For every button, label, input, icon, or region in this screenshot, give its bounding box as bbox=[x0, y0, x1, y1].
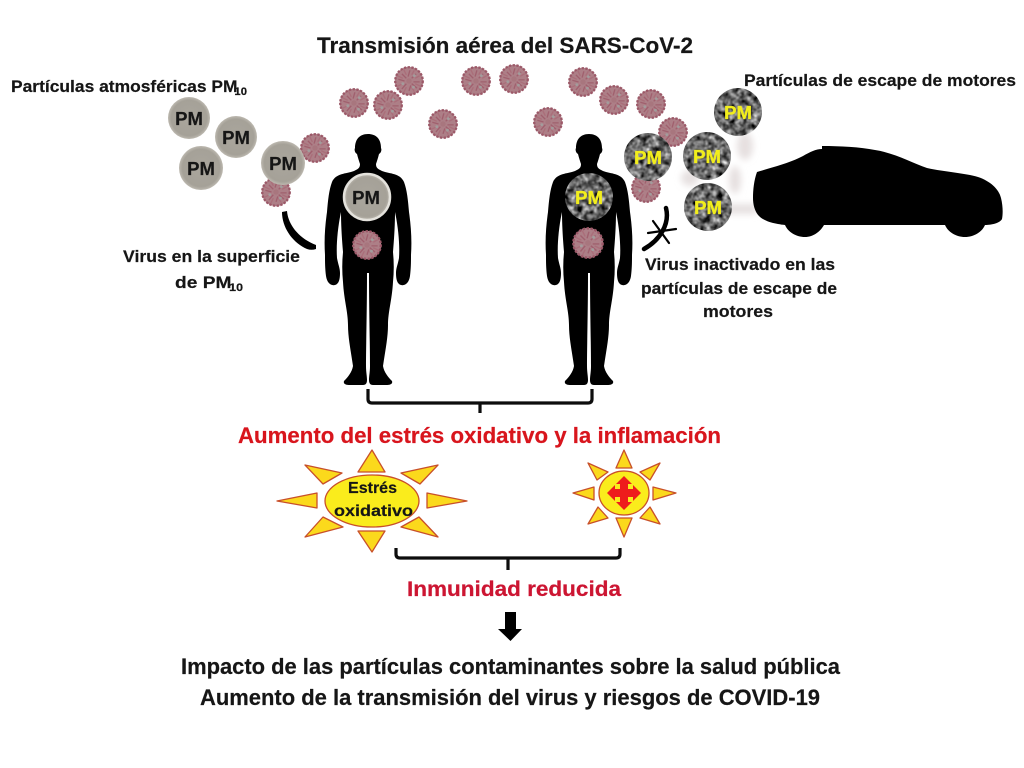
engine exhaust particles: PM bbox=[724, 102, 752, 123]
label: virus on the surface of PM10: 10 bbox=[229, 282, 243, 294]
title: Transmisión aérea del SARS-CoV-2 bbox=[317, 33, 693, 58]
label: virus on the surface of PM10: de PM bbox=[175, 273, 225, 292]
conclusion text bbox=[181, 654, 841, 710]
label: engine exhaust particles: Partículas de escape de motores bbox=[744, 71, 1016, 90]
engine exhaust particles: PM bbox=[693, 146, 721, 167]
conclusion text: Aumento de la transmisión del virus y riesgos de COVID-19 bbox=[200, 685, 820, 710]
engine exhaust particles: PM bbox=[694, 197, 722, 218]
atmospheric PM10 particles: PM bbox=[187, 158, 215, 179]
label: atmospheric particles PM10: 10 bbox=[234, 86, 247, 98]
atmospheric PM10 particles: PM bbox=[269, 153, 297, 174]
exhaust smoke bbox=[681, 132, 757, 214]
label: virus on the surface of PM10: Virus en la superficie bbox=[123, 247, 300, 266]
airborne virus particles bbox=[262, 65, 687, 206]
atmospheric PM10 particles: PM bbox=[222, 127, 250, 148]
engine exhaust particles: PM bbox=[634, 147, 662, 168]
person right bbox=[546, 134, 632, 385]
label: virus on the surface of PM10 bbox=[123, 247, 300, 294]
heading: increased oxidative stress and inflammation: Aumento del estrés oxidativo y la inflamación bbox=[238, 423, 721, 448]
person left bbox=[325, 134, 411, 385]
bracket: both suns bbox=[396, 548, 620, 570]
label: virus inactivated in exhaust particles: Virus inactivado en las bbox=[645, 255, 835, 274]
icon: oxidative stress sun: oxidativo bbox=[334, 503, 413, 520]
atmospheric PM10 particles: PM bbox=[175, 108, 203, 129]
person left: PM bbox=[352, 187, 380, 208]
person right: PM bbox=[575, 187, 603, 208]
icon: oxidative stress sun bbox=[277, 450, 467, 552]
icon: oxidative stress sun: Estrés bbox=[348, 480, 397, 497]
arrow: virus on PM surface bbox=[282, 211, 316, 250]
label: virus inactivated in exhaust particles: partículas de escape de bbox=[641, 279, 837, 298]
icon: car silhouette bbox=[753, 146, 1003, 237]
arrow: down bbox=[498, 612, 522, 641]
atmospheric PM10 particles bbox=[168, 97, 305, 190]
label: virus inactivated in exhaust particles bbox=[641, 255, 837, 321]
icon: blocked arrow bbox=[644, 208, 676, 249]
icon: inflammation sun bbox=[573, 450, 676, 537]
engine exhaust particles bbox=[624, 88, 762, 231]
bracket: both people bbox=[368, 389, 592, 413]
heading: reduced immunity: Inmunidad reducida bbox=[407, 578, 621, 601]
label: atmospheric particles PM10: Partículas atmosféricas PM bbox=[11, 77, 232, 96]
label: virus inactivated in exhaust particles: motores bbox=[703, 302, 773, 321]
conclusion text: Impacto de las partículas contaminantes sobre la salud pública bbox=[181, 654, 841, 679]
